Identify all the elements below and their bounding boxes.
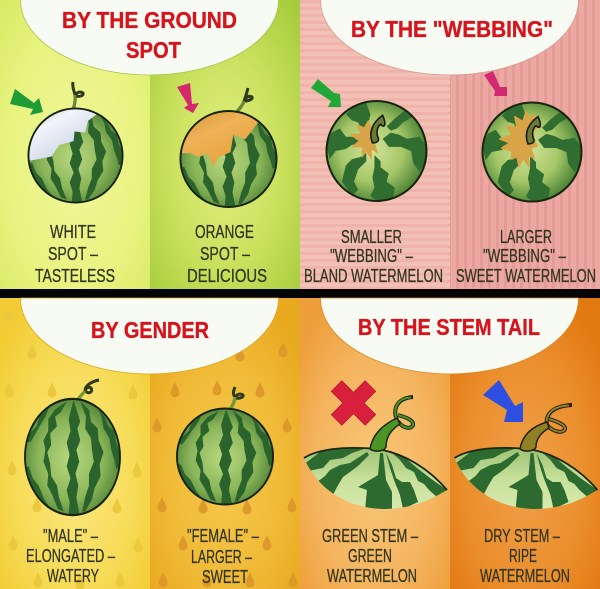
heading bubble: ground spot (20, 0, 278, 75)
caption: dry stem (480, 526, 570, 586)
caption: larger webbing (456, 227, 596, 286)
melon: dry stem dome (454, 405, 598, 510)
melon: smaller webbing (327, 101, 428, 202)
heading bubble: webbing (320, 0, 578, 75)
panel: female (150, 298, 300, 589)
caption: male: ELONGATED – (26, 546, 115, 566)
caption: dry stem: RIPE (509, 546, 537, 566)
panel: ground spot white (0, 0, 150, 289)
melon: male elongated (25, 380, 121, 516)
caption: female: "FEMALE" – (187, 526, 259, 546)
melon: larger webbing (483, 103, 582, 202)
arrow: blue stem (483, 380, 523, 422)
arrow: magenta ground spot (177, 83, 199, 113)
caption: orange spot: DELICIOUS (187, 266, 267, 286)
divider bar (0, 289, 600, 298)
caption: male (26, 526, 115, 586)
caption: white spot (35, 222, 115, 286)
caption: male: WATERY (47, 566, 99, 586)
icon: red cross (320, 369, 387, 437)
title: by the webbing: BY THE "WEBBING" (351, 16, 553, 42)
panel: webbing larger (450, 0, 600, 289)
title: by gender: BY GENDER (91, 317, 209, 343)
caption: orange spot (187, 222, 267, 286)
caption: larger webbing: "WEBBING" – (483, 246, 566, 266)
title: by the ground spot: SPOT (126, 37, 181, 63)
caption: white spot: SPOT – (48, 244, 98, 264)
panel: male (0, 298, 150, 589)
caption: green stem: GREEN STEM – (322, 526, 418, 546)
caption: smaller webbing: SMALLER (341, 227, 402, 247)
arrow: magenta webbing (484, 71, 507, 96)
melon: orange spot (178, 88, 278, 208)
caption: female (187, 526, 259, 587)
arrow: green ground spot (10, 89, 43, 115)
panel: green stem (300, 298, 450, 589)
title: by the stem tail: BY THE STEM TAIL (358, 314, 540, 340)
caption: smaller webbing (304, 227, 443, 286)
caption: orange spot: SPOT – (200, 244, 250, 264)
caption: green stem (322, 526, 418, 586)
caption: orange spot: ORANGE (195, 222, 254, 242)
caption: female: LARGER – (191, 547, 252, 567)
arrow: green webbing (311, 79, 341, 107)
heading bubble: stem tail (320, 298, 578, 374)
panel: webbing smaller (300, 0, 450, 289)
caption: smaller webbing: "WEBBING" – (330, 246, 413, 266)
heading bubble: gender (20, 298, 278, 374)
caption: green stem: GREEN (348, 546, 392, 566)
title: by the ground spot: BY THE GROUND (62, 7, 237, 33)
melon: green stem dome (303, 397, 447, 510)
seed pattern: male panel (4, 307, 142, 589)
panel: dry stem (450, 298, 600, 589)
title: by the ground spot (62, 7, 237, 63)
melon: female round (177, 387, 274, 506)
caption: green stem: WATERMELON (327, 566, 417, 586)
caption: larger webbing: LARGER (500, 227, 552, 247)
caption: white spot: TASTELESS (35, 266, 115, 286)
caption: female: SWEET (202, 567, 248, 587)
panel: ground spot orange (150, 0, 300, 289)
seed pattern: female panel (152, 342, 298, 588)
melon: white spot (26, 82, 123, 204)
caption: male: "MALE" – (43, 526, 98, 546)
caption: smaller webbing: BLAND WATERMELON (304, 266, 443, 286)
caption: dry stem: DRY STEM – (484, 526, 560, 546)
caption: white spot: WHITE (50, 222, 96, 242)
